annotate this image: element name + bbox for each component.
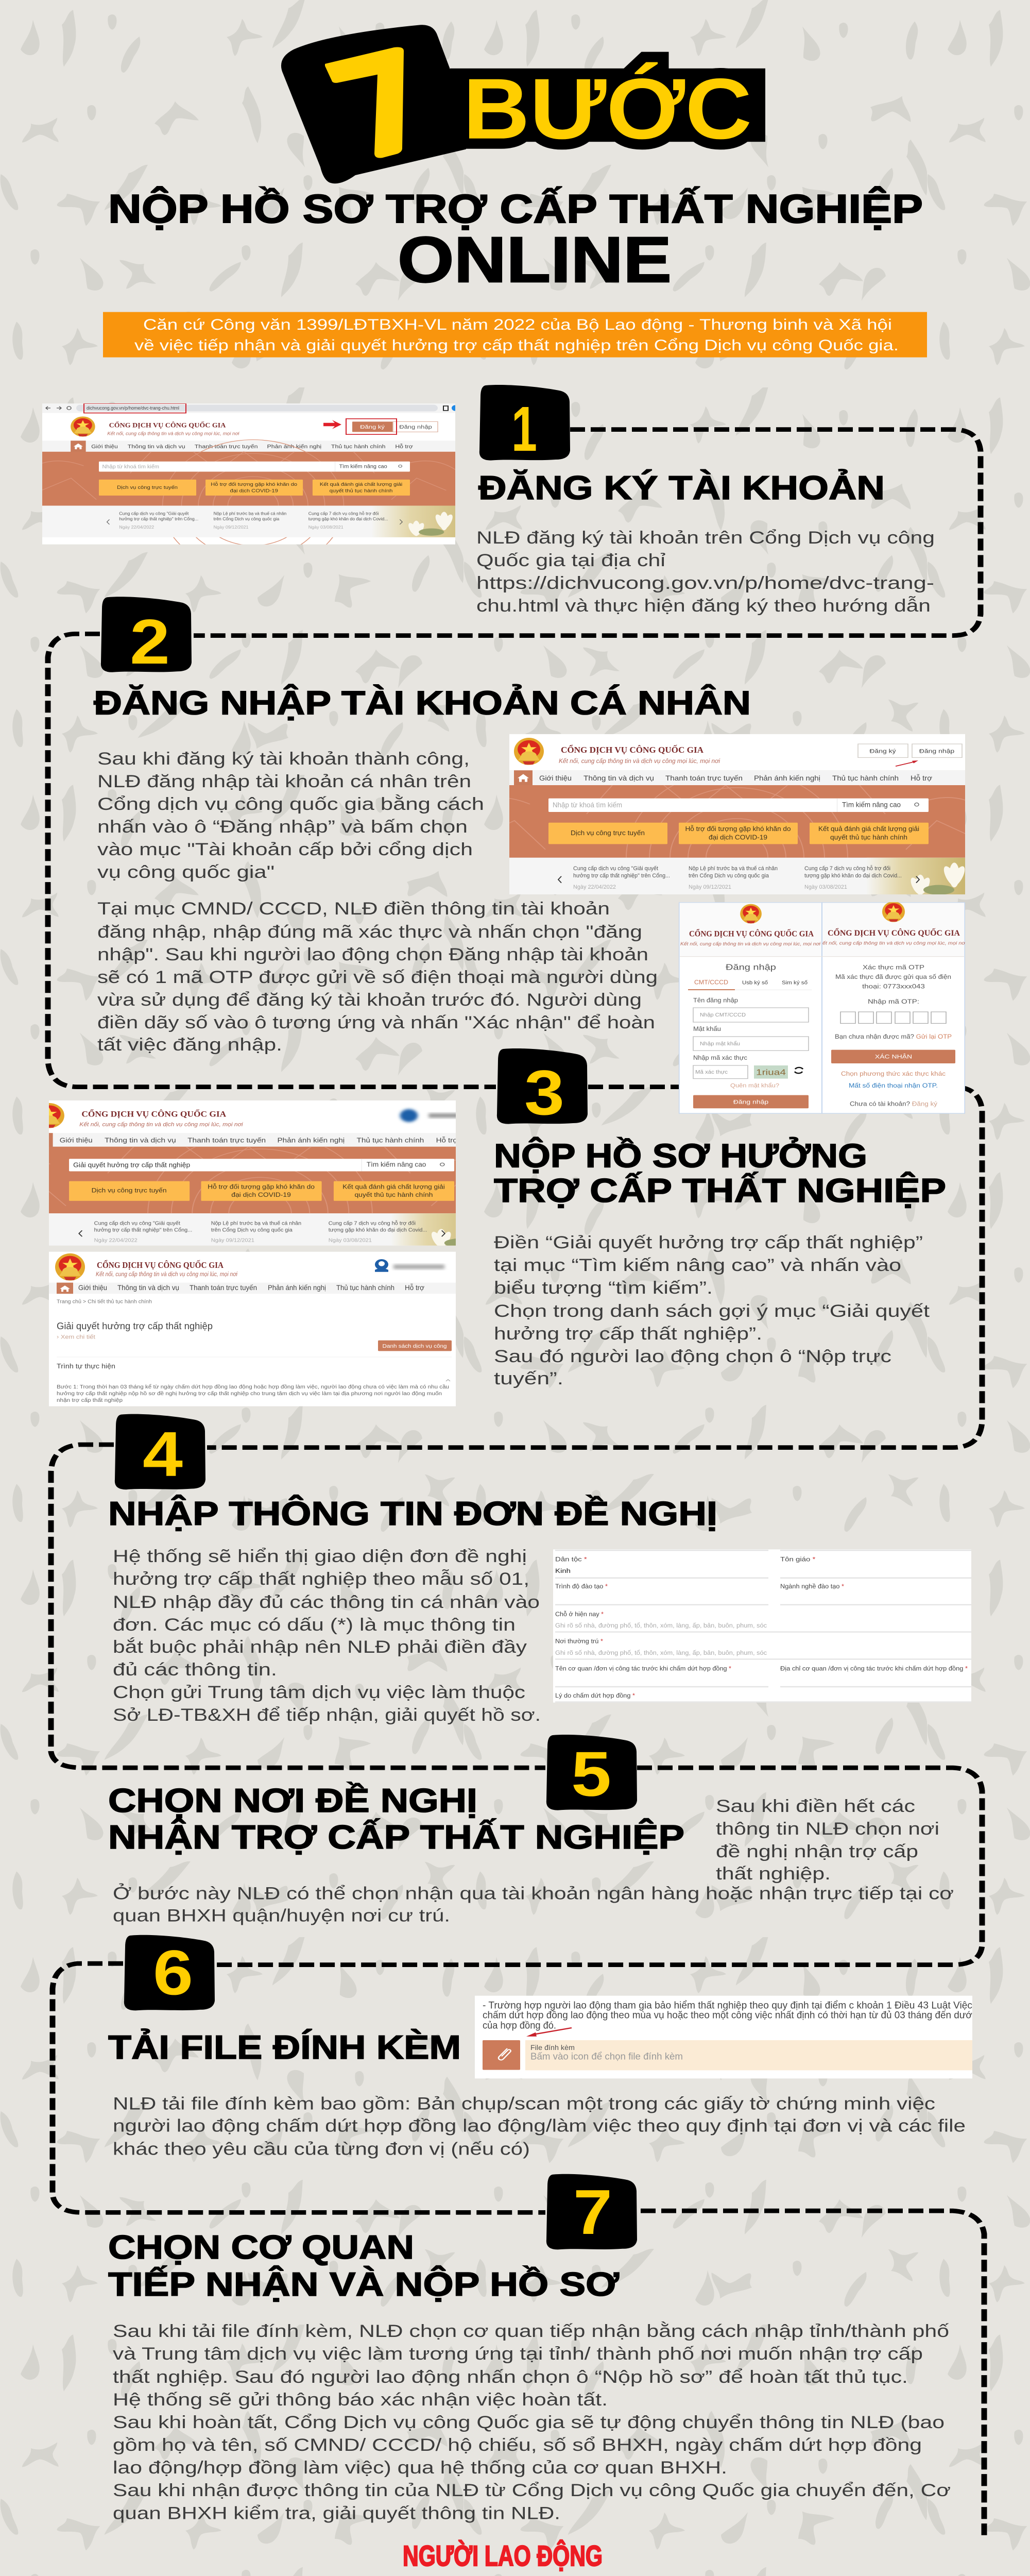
step 4 description: hưởng trợ cấp thất nghiệp theo mẫu số 01,	[113, 1569, 529, 1589]
connector: dashed line step 4 to step 5	[51, 1445, 545, 1768]
screenshot: portal home page with login button: Đăng nhập	[919, 748, 954, 754]
step 7 heading	[108, 2229, 619, 2303]
screenshot: register page: Kết quả đánh giá chất lượng giải	[320, 482, 402, 487]
connector: dashed line step 3 to step 4	[207, 1087, 982, 1448]
screenshot: register page: Ngày 03/08/2021	[308, 526, 344, 530]
step 4 number badge	[115, 1414, 205, 1489]
screenshot: search for unemployment benefit: Nộp Lệ phí trước bạ và thuế cá nhân	[211, 1220, 301, 1226]
screenshot: portal home page with login button: CỔNG DỊCH VỤ CÔNG QUỐC GIA	[561, 745, 703, 755]
screenshot: login and OTP forms: Xác thực mã OTP	[863, 964, 924, 971]
screenshot: login and OTP forms: CMT/CCCD	[694, 979, 728, 986]
screenshot: portal home page with login button: Ngày 22/04/2022	[573, 884, 616, 890]
screenshot: portal home page with login button: Đăng ký	[869, 748, 896, 754]
screenshot: portal home page with login button: hưởng trợ cấp thất nghiệp" trên Cổng...	[573, 872, 670, 879]
screenshot: portal home page with login button: Nhập từ khoá tìm kiếm	[553, 802, 622, 809]
screenshot: login and OTP forms: Chọn phương thức xác thực khác	[841, 1070, 946, 1077]
step 2 description: nhấn vào ô “Đăng nhập” và bấm chọn	[97, 817, 468, 837]
screenshot: procedure detail page: › Xem chi tiết	[57, 1334, 95, 1340]
step 4 description: bắt buộc phải nhập nên NLĐ phải điền đầy	[113, 1637, 527, 1657]
screenshot: portal home page with login button: đại dịch COVID-19	[709, 834, 767, 841]
screenshot: procedure detail page	[49, 1252, 456, 1406]
screenshot: application form: Lý do chấm dứt hợp đồng *	[555, 1692, 636, 1699]
screenshot: register page: Dịch vụ công trực tuyến	[117, 485, 178, 490]
screenshot: register page: Cung cấp 7 dịch vụ công hỗ trợ đối	[308, 512, 379, 516]
screenshot: portal home page with login button	[509, 734, 965, 894]
screenshot: procedure detail page: CỔNG DỊCH VỤ CÔNG QUỐC GIA	[97, 1260, 224, 1270]
screenshot: login and OTP forms: Sim ký số	[782, 980, 808, 986]
step 5 heading: CHỌN NƠI ĐỀ NGHỊ	[108, 1782, 477, 1819]
step 6 description	[113, 2094, 966, 2159]
step 2 description: vụ công quốc gia"	[97, 862, 274, 882]
step 7 description: Sau khi hoàn tất, Cổng Dịch vụ công Quốc gia sẽ tự động chuyển thông tin NLĐ (bao	[113, 2413, 945, 2432]
screenshot: portal home page with login button: Thông tin và dịch vụ	[583, 775, 654, 783]
publisher logo: NGƯỜI LAO ĐỘNG	[403, 2540, 603, 2572]
step 4 description: đơn. Các mục có dấu (*) là mục thông tin	[113, 1615, 516, 1635]
step 5 side note	[716, 1797, 939, 1884]
screenshot: login and OTP forms: XÁC NHẬN	[875, 1053, 912, 1060]
screenshot: register page: Hỗ trợ đối tượng gặp khó khăn do	[211, 482, 297, 487]
step 5 side note: thất nghiệp.	[716, 1864, 831, 1884]
screenshot: login and OTP forms: Đăng nhập	[726, 962, 776, 972]
step 3 heading: TRỢ CẤP THẤT NGHIỆP	[494, 1172, 946, 1209]
step 7 description: Sau khi tải file đính kèm, NLĐ chọn cơ quan tiếp nhận bằng cách nhập tỉnh/thành phố	[113, 2321, 949, 2341]
step 2 description: NLĐ đăng nhập tài khoản cá nhân trên	[97, 772, 471, 791]
screenshot: procedure detail page: Danh sách dịch vụ công	[382, 1343, 447, 1349]
screenshot: application form: Nơi thường trú *	[555, 1638, 604, 1645]
screenshot: file attachment field	[475, 1996, 974, 2078]
step 2 description: vừa sử dụng để đăng ký tài khoản trước đó. Người dùng	[97, 990, 642, 1010]
step 3 number badge: 3	[524, 1057, 564, 1128]
screenshot: login and OTP forms: Đăng nhập	[733, 1099, 768, 1105]
step 7 description: lao động/hợp đồng làm việc) qua hệ thống của cơ quan BHXH.	[113, 2458, 727, 2478]
step 5 side note: đề nghị nhận trợ cấp	[716, 1842, 918, 1861]
screenshot: portal home page with login button: Kết nối, cung cấp thông tin và dịch vụ công mọi lúc, mọi nơi	[559, 757, 720, 764]
screenshot: search for unemployment benefit: trên Cổng Dịch vụ công quốc gia	[211, 1227, 293, 1233]
step 6 number badge	[124, 1935, 215, 2010]
step 6 description: người lao động chấm dứt hợp đồng lao động/làm việc theo quy định tại đơn vị và các file	[113, 2116, 966, 2136]
step 6 heading: TẢI FILE ĐÍNH KÈM	[108, 2028, 461, 2066]
screenshot: register page: Nhập từ khoá tìm kiếm	[102, 464, 159, 469]
screenshot: login and OTP forms: Chưa có tài khoản? Đăng ký	[850, 1100, 937, 1107]
screenshot: login and OTP forms: Nhập CMT/CCCD	[700, 1012, 746, 1018]
step 7 description: Sau khi nhận được thông tin của NLĐ từ Cổng Dịch vụ công Quốc gia chuyển đến, Cơ	[113, 2481, 951, 2500]
screenshot: procedure detail page: Giải quyết hưởng trợ cấp thất nghiệp	[57, 1321, 213, 1331]
heading word BƯỚC: BƯỚC	[463, 61, 752, 157]
screenshot: login and OTP forms: Mất số điện thoại nhận OTP.	[849, 1082, 938, 1089]
step 4 heading: NHẬP THÔNG TIN ĐƠN ĐỀ NGHỊ	[108, 1495, 717, 1532]
connector: dashed line step 5 to step 6	[215, 1768, 982, 1965]
screenshot: application form: Ngành nghề đào tạo *	[780, 1583, 845, 1590]
step 7 number badge	[546, 2174, 637, 2249]
connector: dashed line step 6 to step 7	[53, 1963, 545, 2212]
screenshot: register page: CỔNG DỊCH VỤ CÔNG QUỐC GIA	[109, 421, 226, 429]
screenshot: login and OTP forms: CỔNG DỊCH VỤ CÔNG QUỐC GIA	[689, 929, 814, 938]
screenshot: register page: Đăng ký	[360, 424, 385, 430]
screenshot: portal home page with login button: Ngày 09/12/2021	[689, 884, 731, 890]
screenshot: portal home page with login button: Giới thiệu	[539, 775, 572, 783]
screenshot: register page: Phản ánh kiến nghị	[267, 444, 321, 450]
step 1 number badge: 1	[511, 394, 537, 465]
screenshot: application form: Kinh	[555, 1567, 571, 1574]
step 3 number badge	[497, 1048, 588, 1128]
screenshot: file attachment field: File đính kèm	[530, 2044, 575, 2052]
screenshot: register page: Tìm kiếm nâng cao	[339, 463, 387, 469]
screenshot: login and OTP forms: Mã xác thực	[695, 1069, 728, 1075]
step 4 description: NLĐ nhập đầy đủ các thông tin cá nhân vào	[113, 1592, 540, 1612]
step 1 heading: ĐĂNG KÝ TÀI KHOẢN	[478, 469, 885, 506]
screenshot: login and OTP forms	[679, 902, 966, 1114]
step 7 heading: TIẾP NHẬN VÀ NỘP HỒ SƠ	[108, 2265, 619, 2303]
step 3 description: Điền “Giải quyết hưởng trợ cấp thất nghiệp”	[494, 1233, 923, 1252]
screenshot: search for unemployment benefit: Giải quyết hưởng trợ cấp thất nghiệp	[73, 1162, 190, 1169]
panel: step 1	[25, 385, 935, 616]
step 7 description	[113, 2321, 951, 2523]
step 3 heading: NỘP HỒ SƠ HƯỞNG	[494, 1137, 867, 1175]
big yellow number 7 on black shape	[281, 25, 466, 183]
screenshot: register page: Đăng nhập	[399, 424, 432, 430]
screenshot: search for unemployment benefit: hưởng trợ cấp thất nghiệp" trên Cổng...	[94, 1227, 192, 1233]
step 2 description: tất việc đăng nhập.	[97, 1035, 282, 1055]
step 6 description: khác theo yêu cầu của từng đơn vị (nếu có)	[113, 2139, 530, 2159]
step 2 description: sẽ có 1 mã OTP được gửi về số điện thoại mà người dùng	[97, 968, 658, 987]
step 2 description	[97, 749, 658, 1055]
step 2 description: đăng nhập, nhập đúng mã xác thực và nhấn chọn "đăng	[97, 922, 642, 942]
screenshot: search for unemployment benefit: Giới thiệu	[60, 1137, 93, 1144]
screenshot: register page: tượng gặp khó khăn do đại dịch Covid...	[308, 517, 388, 522]
step 5 description: Ở bước này NLĐ có thể chọn nhận qua tài khoản ngân hàng hoặc nhận trực tiếp tại cơ	[113, 1883, 954, 1903]
screenshot: register page: Thông tin và dịch vụ	[128, 444, 185, 450]
screenshot: portal home page with login button: Phản ánh kiến nghị	[754, 775, 820, 783]
orange intro banner: Căn cứ Công văn 1399/LĐTBXH-VL năm 2022 của Bộ Lao động - Thương binh và Xã hội	[143, 316, 892, 333]
screenshot: register page: Giới thiệu	[91, 444, 118, 450]
screenshot: login and OTP forms: Bạn chưa nhận được mã? Gửi lại OTP	[835, 1033, 952, 1040]
heading line NỘP HỒ SƠ TRỢ CẤP THẤT NGHIỆP: NỘP HỒ SƠ TRỢ CẤP THẤT NGHIỆP	[108, 186, 923, 231]
screenshot: procedure detail page: Hỗ trợ	[405, 1284, 424, 1292]
screenshot: portal home page with login button: Cung cấp 7 dịch vụ công hỗ trợ đối	[804, 865, 890, 871]
panel: step 7	[108, 2174, 951, 2523]
screenshot: search for unemployment benefit: Kết nối, cung cấp thông tin và dịch vụ công mọi lúc, mọi nơi	[79, 1121, 244, 1127]
screenshot: login and OTP forms: thoại: 0773xxx043	[862, 983, 925, 990]
screenshot: search for unemployment benefit: Dịch vụ công trực tuyến	[92, 1188, 167, 1194]
screenshot: application form: Ghi rõ số nhà, đường phố, tổ, thôn, xóm, làng, ấp, bản, buôn, phum, sóc	[555, 1649, 767, 1656]
step 1 description: https://dichvucong.gov.vn/p/home/dvc-trang-	[476, 573, 934, 593]
step 7 number badge: 7	[573, 2177, 612, 2248]
screenshot: register page: Ngày 22/04/2022	[119, 526, 154, 530]
step 5 number badge	[546, 1735, 637, 1810]
screenshot: search for unemployment benefit: Phản ánh kiến nghị	[277, 1137, 345, 1144]
screenshot: portal home page with login button: tượng gặp khó khăn do đại dịch Covid...	[804, 872, 902, 879]
orange intro banner	[103, 312, 927, 358]
screenshot: portal home page with login button: quyết thủ tục hành chính	[830, 834, 907, 841]
screenshot: search for unemployment benefit: Ngày 22/04/2022	[94, 1237, 138, 1243]
step 2 description: điền dãy số vào ô tương ứng và nhấn "Xác nhận" để hoàn	[97, 1013, 655, 1032]
screenshot: application form: Tôn giáo *	[780, 1556, 816, 1563]
screenshot: procedure detail page: Thanh toán trực tuyến	[190, 1284, 257, 1292]
connector: dashed line after step 7	[641, 2211, 984, 2535]
screenshot: search for unemployment benefit: Thông tin và dịch vụ	[105, 1137, 176, 1144]
screenshot: application form: Chỗ ở hiện nay *	[555, 1611, 604, 1617]
screenshot: search for unemployment benefit: tượng gặp khó khăn do đại dịch Covid...	[329, 1227, 427, 1233]
step 2 description: Tại mục CMND/ CCCD, NLĐ điền thông tin tài khoản	[97, 899, 610, 919]
title block	[103, 25, 927, 358]
screenshot: login and OTP forms: Nhập mật khẩu	[700, 1041, 740, 1046]
screenshot: application form	[553, 1549, 971, 1703]
panel: step 4	[108, 1414, 971, 1725]
screenshot: procedure detail page: Trang chủ > Chi tiết thủ tục hành chính	[57, 1299, 152, 1304]
step 5 side note: thông tin NLĐ chọn nơi	[716, 1819, 939, 1839]
screenshot: search for unemployment benefit: đại dịch COVID-19	[231, 1192, 291, 1198]
screenshot: portal home page with login button: Tìm kiếm nâng cao	[842, 801, 901, 809]
step 4 description: Sở LĐ-TB&XH để tiếp nhận, giải quyết hồ sơ.	[113, 1705, 541, 1725]
screenshot: register page: đại dịch COVID-19	[230, 488, 278, 494]
screenshot: register page: trên Cổng Dịch vụ công quốc gia	[214, 517, 280, 522]
screenshot: search for unemployment benefit: Kết quả đánh giá chất lượng giải	[342, 1183, 445, 1191]
screenshot: portal home page with login button: Ngày 03/08/2021	[804, 884, 847, 890]
screenshot: file attachment field: của hợp đồng đó.	[483, 2020, 556, 2031]
step 2 description: nhập". Sau khi người lao động chọn Đăng nhập tài khoản	[97, 945, 648, 964]
screenshot: search for unemployment benefit: Ngày 03/08/2021	[329, 1237, 372, 1243]
panel: step 3	[0, 1048, 946, 1406]
screenshot: login and OTP forms: Tên đăng nhập	[693, 997, 738, 1004]
screenshot: portal home page with login button: Nộp Lệ phí trước bạ và thuế cá nhân	[689, 865, 778, 871]
screenshot: portal home page with login button: Thủ tục hành chính	[832, 775, 899, 783]
step 3 description: Chọn trong danh sách gợi ý mục “Giải quyết	[494, 1301, 930, 1321]
step 2 heading: ĐĂNG NHẬP TÀI KHOẢN CÁ NHÂN	[94, 684, 751, 722]
screenshot: procedure detail page: Thủ tục hành chính	[336, 1284, 394, 1292]
screenshot: register page: Cung cấp dịch vụ công "Giải quyết	[119, 512, 189, 516]
screenshot: login and OTP forms: 1riua4	[756, 1067, 786, 1077]
step 4 description	[113, 1547, 541, 1725]
screenshot: portal home page with login button: Hỗ trợ	[911, 775, 932, 783]
screenshot: search for unemployment benefit: Thủ tục hành chính	[357, 1137, 424, 1144]
connector: dashed line into step 2 and down to step 3	[48, 634, 496, 1087]
step 3 description: hưởng trợ cấp thất nghiệp”.	[494, 1324, 762, 1344]
screenshot: search for unemployment benefit: quyết thủ tục hành chính	[354, 1192, 433, 1198]
connector: dashed line step 1 to step 2	[194, 430, 981, 636]
screenshot: register page: quyết thủ tục hành chính	[330, 488, 392, 494]
screenshot: login and OTP forms: Nhập mã xác thực	[693, 1054, 747, 1061]
step 2 number badge: 2	[130, 606, 170, 677]
screenshot: portal home page with login button: Dịch vụ công trực tuyến	[571, 829, 645, 837]
step 2 description: Sau khi đăng ký tài khoản thành công,	[97, 749, 470, 769]
step 1 description: chu.html và thực hiện đăng ký theo hướng dẫn	[476, 596, 931, 616]
step 1 description	[476, 528, 935, 616]
screenshot: login and OTP forms: Nhập mã OTP:	[868, 998, 919, 1005]
panel: step 5	[108, 1735, 954, 1926]
step 1 description: Quốc gia tại địa chỉ	[476, 551, 665, 570]
step 5 heading: NHẬN TRỢ CẤP THẤT NGHIỆP	[108, 1818, 684, 1856]
screenshot: search for unemployment benefit: Thanh toán trực tuyến	[187, 1137, 266, 1144]
panel: step 6	[108, 1935, 974, 2159]
screenshot: search for unemployment benefit: Hỗ trợ đối tượng gặp khó khăn do	[208, 1183, 315, 1191]
screenshot: search for unemployment benefit	[49, 1100, 458, 1246]
screenshot: application form: Trình độ đào tạo *	[555, 1583, 608, 1590]
step 5 description	[113, 1883, 954, 1926]
screenshot: application form: Dân tộc *	[555, 1556, 587, 1563]
step 3 description	[494, 1233, 930, 1388]
screenshot: procedure detail page: Giới thiệu	[78, 1284, 107, 1292]
step 4 number badge: 4	[143, 1418, 183, 1489]
screenshot: portal home page with login button: Kết quả đánh giá chất lượng giải	[818, 825, 919, 833]
screenshot: register page: Nộp Lệ phí trước bạ và thuế cá nhân	[214, 512, 286, 516]
step 5 description: quan BHXH quận/huyện nơi cư trú.	[113, 1906, 450, 1926]
screenshot: procedure detail page: nhận trợ cấp thất nghiệp	[57, 1397, 123, 1403]
screenshot: login and OTP forms: Mã xác thực đã được gửi qua số điện	[835, 973, 951, 980]
screenshot: login and OTP forms: Usb ký số	[742, 980, 768, 986]
screenshot: register page	[42, 403, 455, 545]
step 1 number badge	[479, 385, 570, 465]
screenshot: login and OTP forms: Kết nối, cung cấp thông tin và dịch vụ công mọi lúc, mọi nơi	[680, 941, 821, 947]
screenshot: search for unemployment benefit: CỔNG DỊCH VỤ CÔNG QUỐC GIA	[81, 1109, 227, 1119]
step 2 description: vào mục "Tài khoản cấp bởi cổng dịch	[97, 840, 473, 859]
screenshot: search for unemployment benefit: Cung cấp dịch vụ công "Giải quyết	[94, 1220, 181, 1226]
step 5 heading	[108, 1782, 684, 1856]
step 7 description: quan BHXH kiểm tra, giải quyết thông tin NLĐ.	[113, 2504, 560, 2523]
screenshot: portal home page with login button: Cung cấp dịch vụ công "Giải quyết	[573, 865, 659, 871]
step 3 description: biểu tượng “tìm kiếm”.	[494, 1278, 713, 1298]
step 1 description: NLĐ đăng ký tài khoản trên Cổng Dịch vụ công	[476, 528, 935, 548]
screenshot: application form: Tên cơ quan /đơn vị công tác trước khi chấm dứt hợp đồng *	[555, 1665, 732, 1672]
screenshot: register page: dichvucong.gov.vn/p/home/dvc-trang-chu.html	[87, 405, 179, 411]
screenshot: file attachment field: Bấm vào icon để chọn file đính kèm	[530, 2052, 683, 2062]
screenshot: login and OTP forms: Quên mật khẩu?	[730, 1082, 779, 1089]
screenshot: search for unemployment benefit: Tìm kiếm nâng cao	[367, 1161, 426, 1168]
black backing block behind BƯỚC	[450, 69, 765, 142]
screenshot: portal home page with login button: Thanh toán trực tuyến	[665, 775, 743, 783]
heading word ONLINE: ONLINE	[398, 224, 672, 296]
screenshot: register page: Hỗ trợ	[395, 443, 413, 450]
step 7 description: thất nghiệp. Sau đó người lao động nhấn chọn ô “Nộp hồ sơ” để hoàn tất thủ tục.	[113, 2367, 908, 2387]
step 6 number badge: 6	[153, 1937, 193, 2008]
step 3 description: Sau đó người lao động chọn ô “Nộp trực	[494, 1347, 891, 1366]
panel: step 2	[94, 597, 988, 1114]
screenshot: portal home page with login button: Hỗ trợ đối tượng gặp khó khăn do	[685, 825, 791, 833]
screenshot: procedure detail page: Trình tự thực hiện	[57, 1363, 115, 1370]
step 7 description: và Trung tâm dịch vụ việc làm tương ứng tại tỉnh/ thành phố nơi muốn nhận trợ cấp	[113, 2344, 923, 2364]
step 6 description: NLĐ tải file đính kèm bao gồm: Bản chụp/scan một trong các giấy tờ chứng minh việc	[113, 2094, 935, 2113]
step 7 description: gồm họ và tên, số CMND/ CCCD/ hộ chiếu, số sổ BHXH, ngày chấm dứt hợp đồng	[113, 2435, 922, 2455]
step 3 description: tại mục “Tìm kiếm nâng cao” và nhấn vào	[494, 1256, 901, 1275]
step 2 number badge	[101, 597, 192, 677]
screenshot: search for unemployment benefit: Hỗ trợ	[436, 1137, 458, 1144]
step 4 description: Hệ thống sẽ hiển thị giao diện đơn đề nghị	[113, 1547, 527, 1566]
screenshot: procedure detail page: Thông tin và dịch vụ	[117, 1284, 179, 1292]
step 2 description: Cổng dịch vụ công quốc gia bằng cách	[97, 794, 484, 814]
screenshot: register page: Kết nối, cung cấp thông tin và dịch vụ công mọi lúc, mọi nơi	[107, 431, 239, 436]
step 5 number badge: 5	[571, 1738, 611, 1809]
screenshot: register page: hưởng trợ cấp thất nghiệp" trên Cổng...	[119, 517, 198, 522]
screenshot: procedure detail page: Kết nối, cung cấp thông tin và dịch vụ công mọi lúc, mọi nơi	[96, 1270, 238, 1277]
screenshot: portal home page with login button: trên Cổng Dịch vụ công quốc gia	[689, 872, 769, 879]
screenshot: register page: Ngày 09/12/2021	[214, 526, 249, 530]
screenshot: search for unemployment benefit: Ngày 09/12/2021	[211, 1237, 254, 1243]
screenshot: procedure detail page: Phản ánh kiến nghị	[268, 1284, 326, 1292]
screenshot: search for unemployment benefit: Cung cấp 7 dịch vụ công hỗ trợ đối	[329, 1219, 416, 1226]
step 3 description: tuyến”.	[494, 1369, 563, 1388]
screenshot: application form: Ghi rõ số nhà, đường phố, tổ, thôn, xóm, làng, ấp, bản, buôn, phum, sóc	[555, 1622, 767, 1629]
step 5 side note: Sau khi điền hết các	[716, 1797, 915, 1816]
orange intro banner: về việc tiếp nhận và giải quyết hưởng trợ cấp thất nghiệp trên Cổng Dịch vụ công Quốc gia.	[134, 337, 899, 354]
step 3 heading	[494, 1137, 946, 1209]
screenshot: register page: Thủ tục hành chính	[331, 444, 386, 450]
screenshot: login and OTP forms: Mật khẩu	[693, 1025, 721, 1032]
step 4 description: Chọn gửi Trung tâm dịch vụ việc làm thuộc	[113, 1683, 525, 1702]
step 4 description: đủ các thông tin.	[113, 1660, 277, 1680]
screenshot: register page: Thanh toán trực tuyến	[195, 444, 258, 450]
step 7 heading: CHỌN CƠ QUAN	[108, 2229, 414, 2266]
step 7 description: Hệ thống sẽ gửi thông báo xác nhận việc hoàn tất.	[113, 2390, 608, 2410]
